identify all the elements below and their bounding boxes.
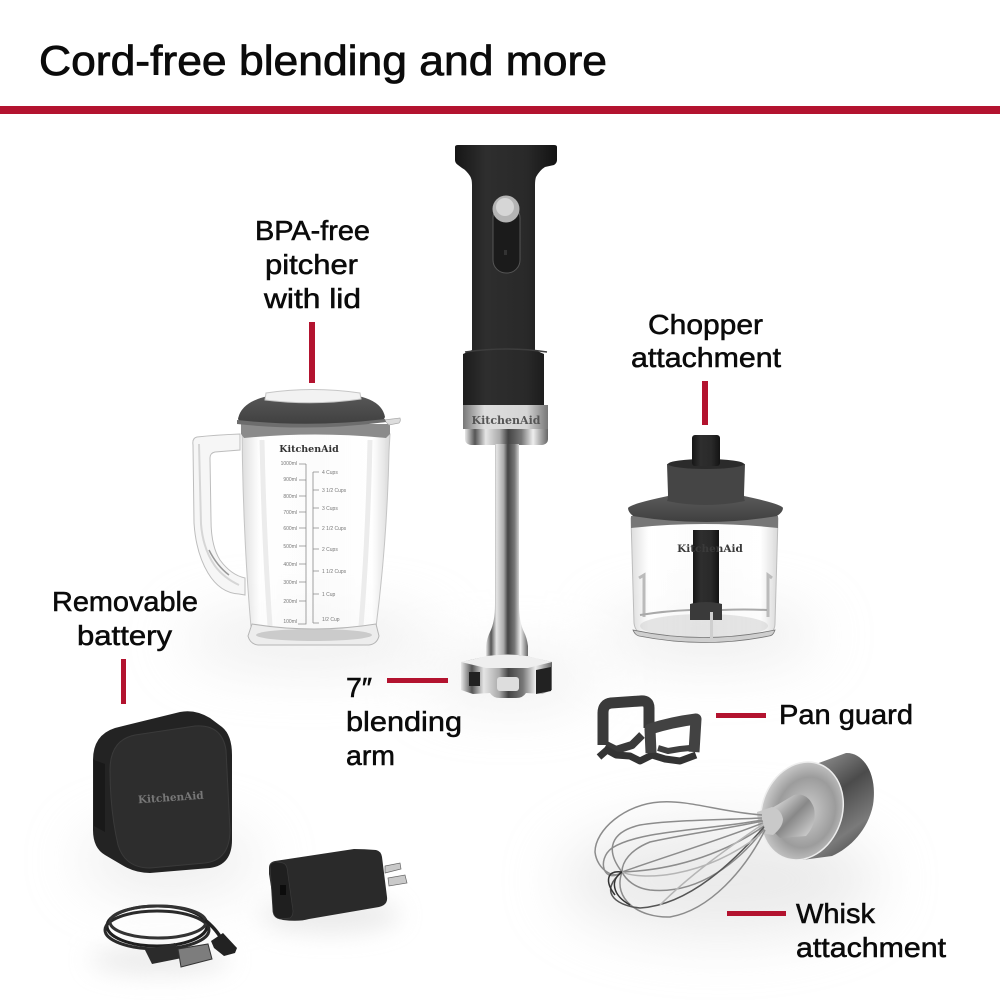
label: BPA-free pitcher with lid: pitcher <box>265 249 358 280</box>
ml scale: 700ml <box>283 510 297 516</box>
handle <box>193 434 245 595</box>
power button and speed control <box>492 196 520 273</box>
pitcher <box>193 390 400 645</box>
cups scale <box>313 470 347 623</box>
lid <box>628 496 783 522</box>
whisk attachment <box>595 750 874 917</box>
USB cable <box>105 906 237 967</box>
leader: whisk <box>727 911 786 916</box>
leader: blending arm <box>387 678 448 683</box>
cups scale: 2 1/2 Cups <box>322 526 347 532</box>
label: removable battery: Removable <box>52 586 198 617</box>
drive spindle <box>692 435 720 466</box>
cups scale: 3 Cups <box>322 506 338 512</box>
cups scale: 1/2 Cup <box>322 617 340 623</box>
bowl <box>631 518 778 640</box>
label: BPA-free pitcher with lid <box>255 215 370 314</box>
label: removable battery <box>52 586 198 651</box>
chrome neck <box>465 429 548 445</box>
USB-C plug <box>211 933 237 956</box>
base <box>248 624 379 645</box>
lid <box>238 392 385 426</box>
ml scale: 200ml <box>283 599 297 605</box>
label: chopper attachment: attachment <box>631 342 781 373</box>
stepped neck <box>772 795 815 838</box>
ml scale: 1000ml <box>281 461 297 467</box>
hub <box>667 460 745 505</box>
inner shaft <box>693 530 719 612</box>
leader: battery <box>121 659 126 704</box>
cups scale: 1 1/2 Cups <box>322 569 347 575</box>
cups scale: 3 1/2 Cups <box>322 488 347 494</box>
soft floor shadows <box>80 610 880 974</box>
blending arm shaft <box>486 444 528 656</box>
jug body <box>242 429 390 632</box>
chopper <box>628 435 783 642</box>
lid cap <box>265 390 361 403</box>
label: 7 inch blending arm: 7″ <box>346 672 372 703</box>
ml scale: 500ml <box>283 544 297 550</box>
label: whisk attachment: Whisk <box>796 898 876 929</box>
smoked collar <box>241 424 390 438</box>
label: BPA-free pitcher with lid: with lid <box>263 283 361 314</box>
collar seam <box>465 349 547 352</box>
battery <box>93 711 232 873</box>
label: removable battery: battery <box>77 620 172 651</box>
motor handle <box>455 145 557 406</box>
glass highlights <box>262 440 370 626</box>
cups scale: 2 Cups <box>322 547 338 553</box>
cups scale: 4 Cups <box>322 470 338 476</box>
title rule <box>0 106 1000 114</box>
label: 7 inch blending arm: arm <box>346 740 395 771</box>
cups scale: 1 Cup <box>322 592 336 598</box>
smoked rim <box>631 516 778 528</box>
wires <box>595 802 765 917</box>
label: pan guard: Pan guard <box>779 699 913 730</box>
leader: chopper <box>702 381 708 425</box>
title: Cord-free blending and more <box>39 37 607 84</box>
immersion blender <box>455 145 557 698</box>
ml scale: 100ml <box>283 619 297 625</box>
steel head <box>802 753 874 860</box>
ml scale: 800ml <box>283 494 297 500</box>
label: chopper attachment <box>631 309 781 373</box>
silver band with brand: KitchenAid <box>472 414 541 427</box>
ml scale: 400ml <box>283 562 297 568</box>
brand on pitcher: KitchenAid <box>279 444 339 455</box>
ml scale: 300ml <box>283 580 297 586</box>
brand on chopper: KitchenAid <box>677 543 744 555</box>
window ribs <box>639 575 772 617</box>
label: chopper attachment: Chopper <box>648 309 763 340</box>
blades <box>640 610 767 615</box>
label: BPA-free pitcher with lid: BPA-free <box>255 215 370 246</box>
pan guard <box>599 701 696 761</box>
silver band with brand <box>463 405 548 429</box>
ml scale <box>281 461 306 625</box>
USB-A plug <box>145 943 182 964</box>
leader: pan guard <box>716 713 766 718</box>
bowl base <box>640 614 768 638</box>
wall adapter <box>269 849 407 921</box>
label: 7 inch blending arm: blending <box>346 706 462 737</box>
ml scale: 900ml <box>283 477 297 483</box>
label: whisk attachment: attachment <box>796 932 946 963</box>
label: 7 inch blending arm <box>346 672 462 771</box>
ml scale: 600ml <box>283 526 297 532</box>
leader: pitcher <box>309 322 315 383</box>
label: whisk attachment <box>796 898 946 963</box>
battery: KitchenAid <box>138 790 205 806</box>
blade guard <box>461 654 552 698</box>
